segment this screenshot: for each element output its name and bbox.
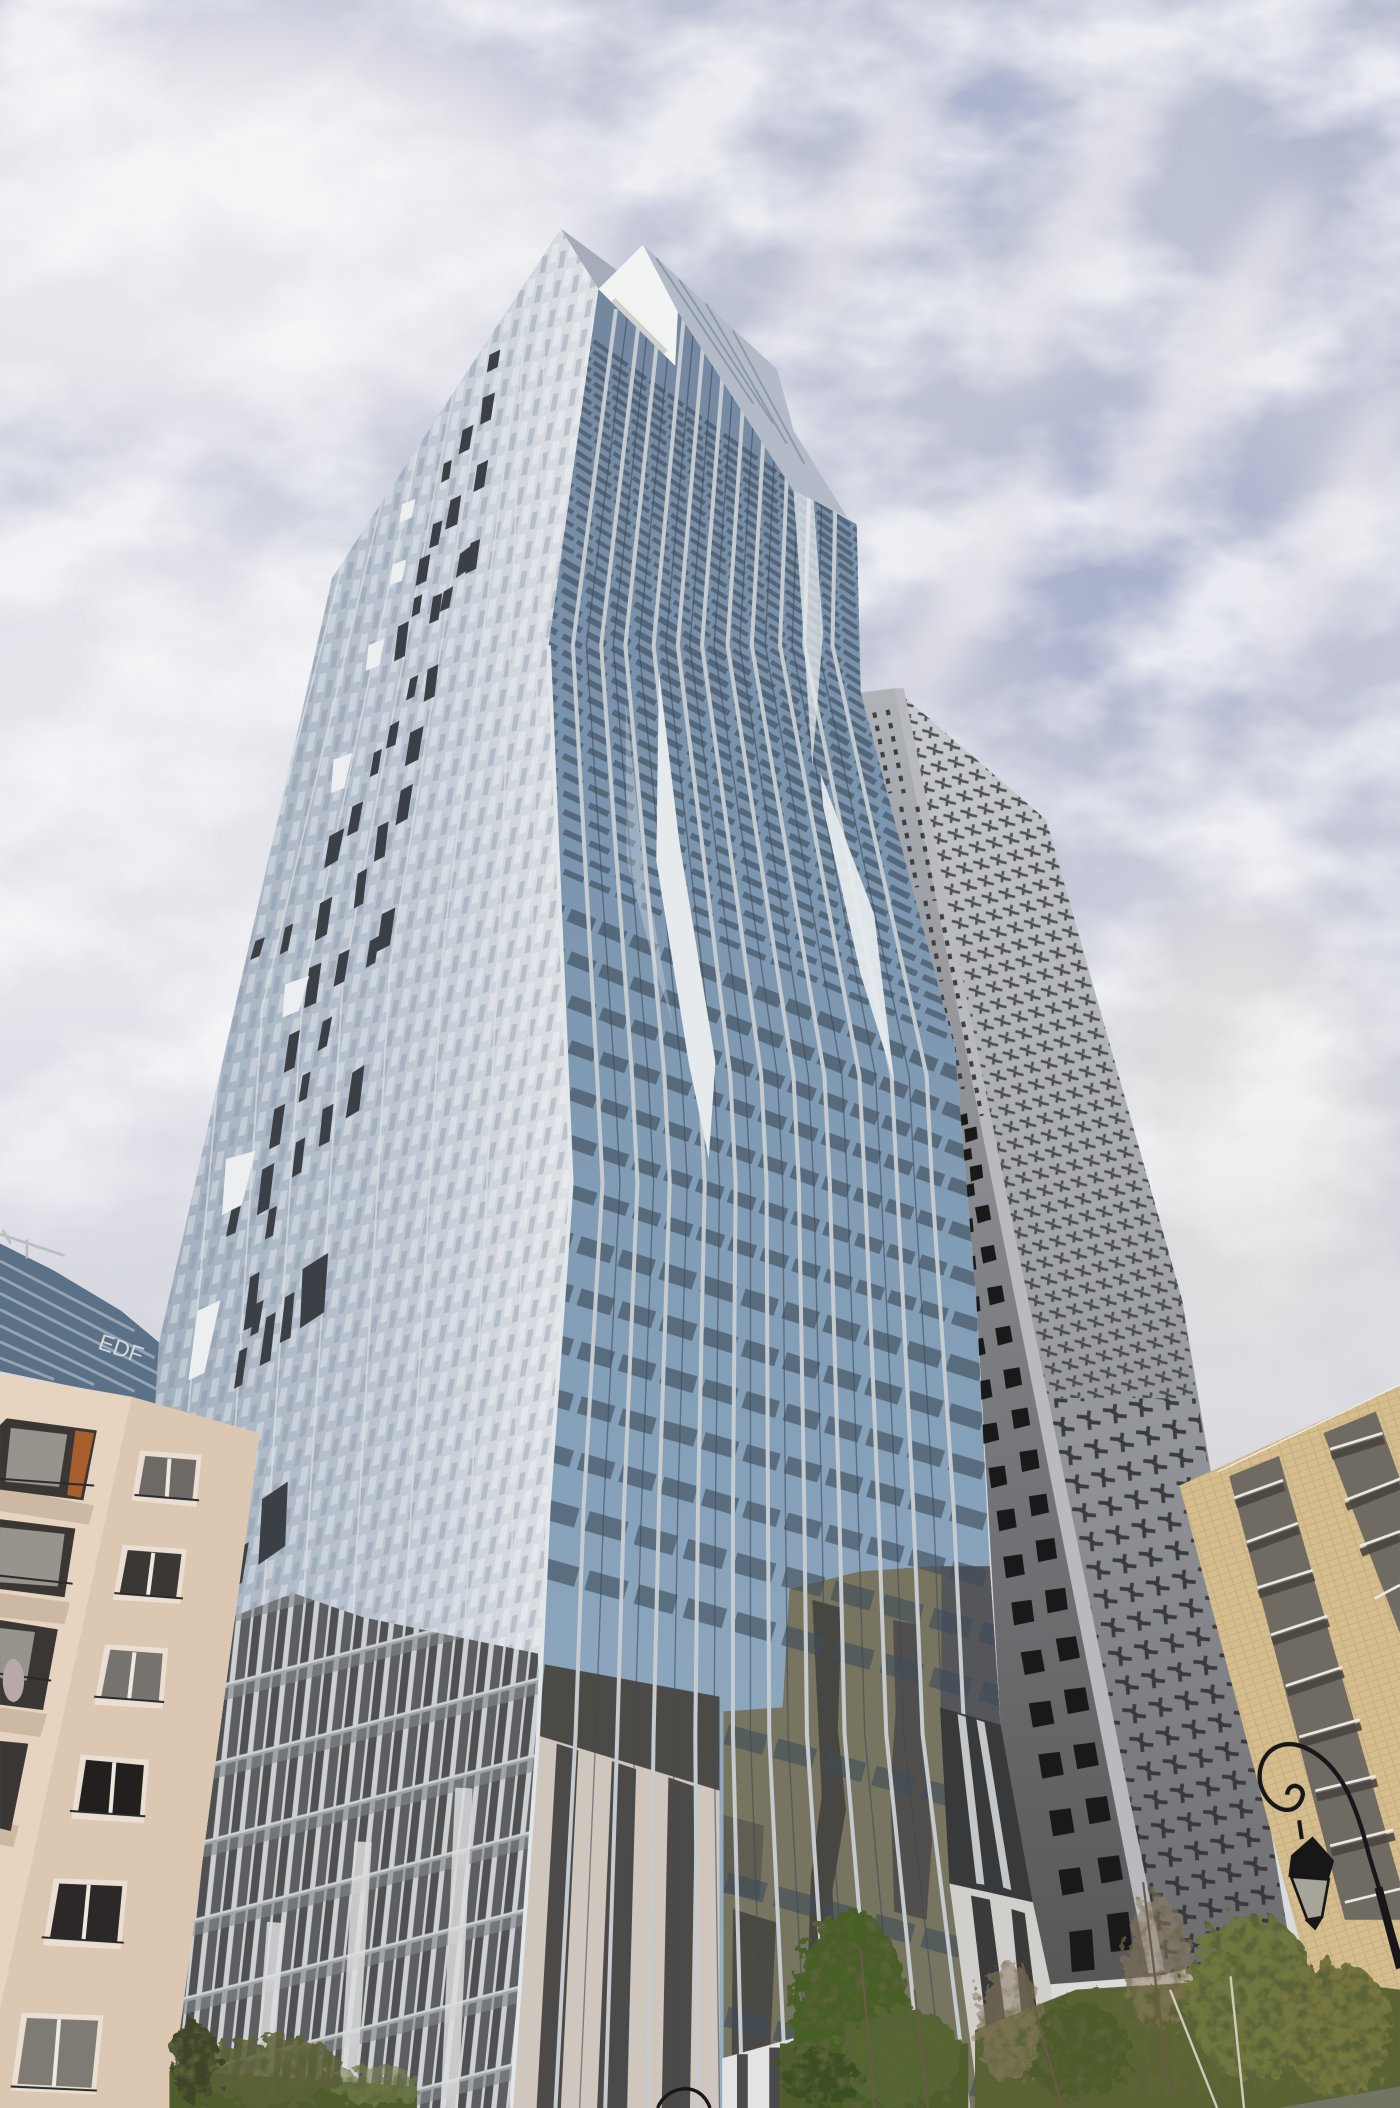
main tower: front glass facade [511,289,1062,2108]
tree: right group [976,1896,1392,2099]
floor bands on left wing [0,1487,94,1847]
left beige apartment building [0,1374,260,2108]
windows on right wall [11,1451,202,2095]
building reflections in lower glass [511,1566,1062,2108]
tree: central [780,1909,963,2108]
ornate street lamp [1260,1744,1400,1968]
light panels at base of left facade [262,1788,464,2108]
balcony bays [1229,1456,1400,1920]
square window holes [958,1113,1132,1972]
lower reflection in dark glass [169,1593,538,2108]
vertical mullions [555,309,1018,2108]
thin sub-mullions [580,309,993,2108]
balcony rails [1236,1440,1400,1853]
tower face: right side [894,688,1290,1976]
diagonal cloud streaks at right [765,57,1400,736]
trees along the base [169,1882,1400,2108]
foliage base filling the ground at bottom [975,1976,1400,2108]
dark tilted glazing at front right base [940,1707,1033,1902]
main tower: left facade [155,229,598,2108]
upper small slots on left side [874,710,982,1116]
bright folds in the facade [625,491,894,1159]
right tan brick apartment building [1179,1385,1400,2108]
beige panels at base [511,1736,720,2108]
figure on balcony [3,1659,24,1702]
mullion lines on left facade [188,255,545,1651]
iron fence at bottom right [1278,2086,1400,2108]
sky background with clouds [0,0,1400,1366]
EDF logo text: EDF [95,1329,147,1368]
textured cloud wisps [0,0,1400,1311]
lantern [1288,1836,1334,1879]
pale birch trunks [1170,1976,1244,2108]
roof crown facets [561,229,847,518]
small white entrance block [722,2038,807,2108]
lamp arc at bottom centre [658,2089,710,2108]
floor spandrels [538,301,1062,2108]
tree: left small [171,2023,424,2105]
balcony windows left wing [0,1418,97,1831]
tower face: left side [861,688,1157,1984]
scattered dark recessed windows [226,350,500,1586]
white crown facet [598,245,678,366]
EDF tower in the background [0,1230,161,1405]
second tower: white perforated facade [861,686,1305,1990]
left crown facet [561,229,619,289]
white glass blocks [188,499,416,1381]
sloped right crown glass [643,245,847,518]
